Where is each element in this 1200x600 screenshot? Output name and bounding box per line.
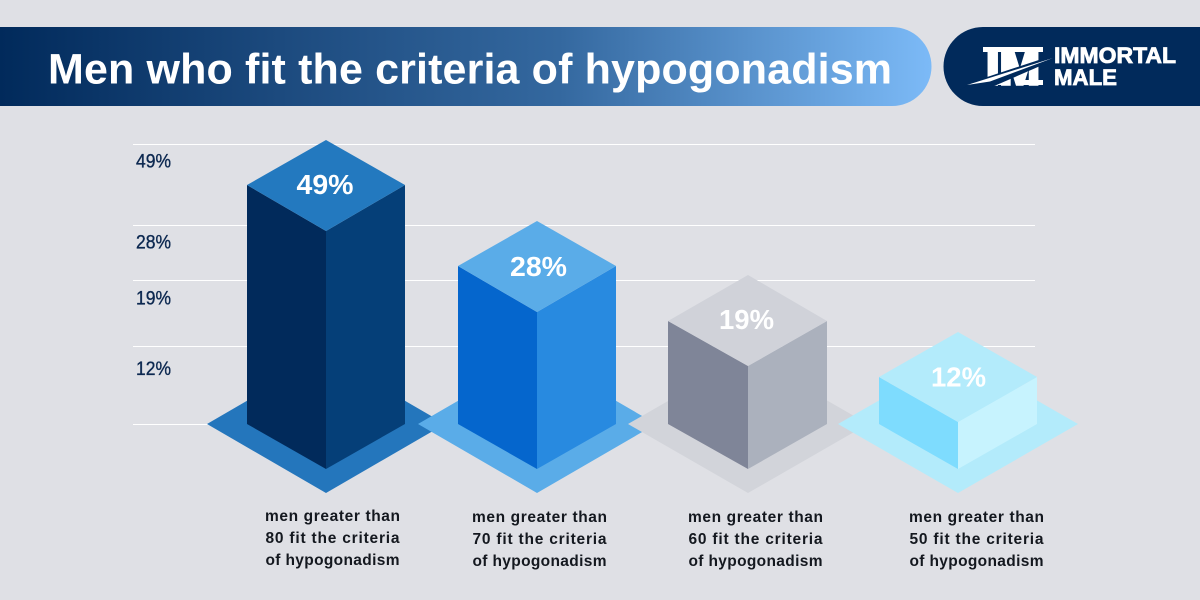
header banner <box>0 27 932 106</box>
left face <box>458 266 537 469</box>
caption: 60: 60 fit the criteria <box>688 531 823 548</box>
left face <box>247 185 326 469</box>
caption: 80: 80 fit the criteria <box>266 530 400 547</box>
value: 19% <box>719 304 774 335</box>
caption: 70: of hypogonadism <box>472 553 606 570</box>
top face <box>668 275 827 366</box>
right face <box>958 377 1037 469</box>
y axis labels <box>136 152 171 380</box>
top face <box>247 140 405 231</box>
value: 12% <box>931 362 986 392</box>
value: 49% <box>296 169 354 200</box>
logo slash <box>960 55 1054 90</box>
left face <box>668 321 748 469</box>
logo badge <box>944 27 1200 106</box>
y axis labels: 12% <box>136 359 171 380</box>
caption: 70: 70 fit the criteria <box>472 531 607 548</box>
bar: 28% men greater than 70 <box>418 221 656 493</box>
value: 28% <box>510 251 567 282</box>
caption: 50: of hypogonadism <box>910 553 1044 570</box>
caption: 60 <box>688 509 823 570</box>
gridlines <box>133 144 1035 424</box>
y axis labels: 19% <box>136 288 171 310</box>
bar: 19% men greater than 60 <box>628 275 868 493</box>
caption: 80: men greater than <box>265 508 400 525</box>
caption: 50: 50 fit the criteria <box>910 531 1044 548</box>
left face <box>879 377 958 469</box>
bar: 49% men greater than 80 <box>207 140 445 493</box>
right face <box>326 185 405 469</box>
title: Men who fit the criteria of hypogonadism <box>48 46 892 94</box>
logo wordmark: IMMORTAL <box>1054 43 1176 68</box>
caption: 50 <box>909 509 1044 570</box>
bar: 12% men greater than 50 <box>838 332 1078 493</box>
base shadow <box>207 355 445 493</box>
caption: 60: men greater than <box>688 509 823 526</box>
right face <box>537 266 616 469</box>
caption: 50: men greater than <box>909 509 1044 526</box>
y axis labels: 28% <box>136 232 171 254</box>
logo badge: MALE <box>1054 65 1117 90</box>
logo monogram: IM <box>986 39 1040 95</box>
right face <box>748 321 827 469</box>
caption: 80: of hypogonadism <box>266 552 400 569</box>
caption: 70 <box>472 509 607 570</box>
top face <box>458 221 616 312</box>
caption: 60: of hypogonadism <box>688 553 822 570</box>
caption: 80 <box>265 508 400 569</box>
top face <box>879 332 1037 422</box>
caption: 70: men greater than <box>472 509 607 526</box>
base shadow <box>418 355 656 493</box>
base shadow <box>628 355 868 493</box>
base shadow <box>838 355 1078 493</box>
y axis labels: 49% <box>136 152 171 172</box>
